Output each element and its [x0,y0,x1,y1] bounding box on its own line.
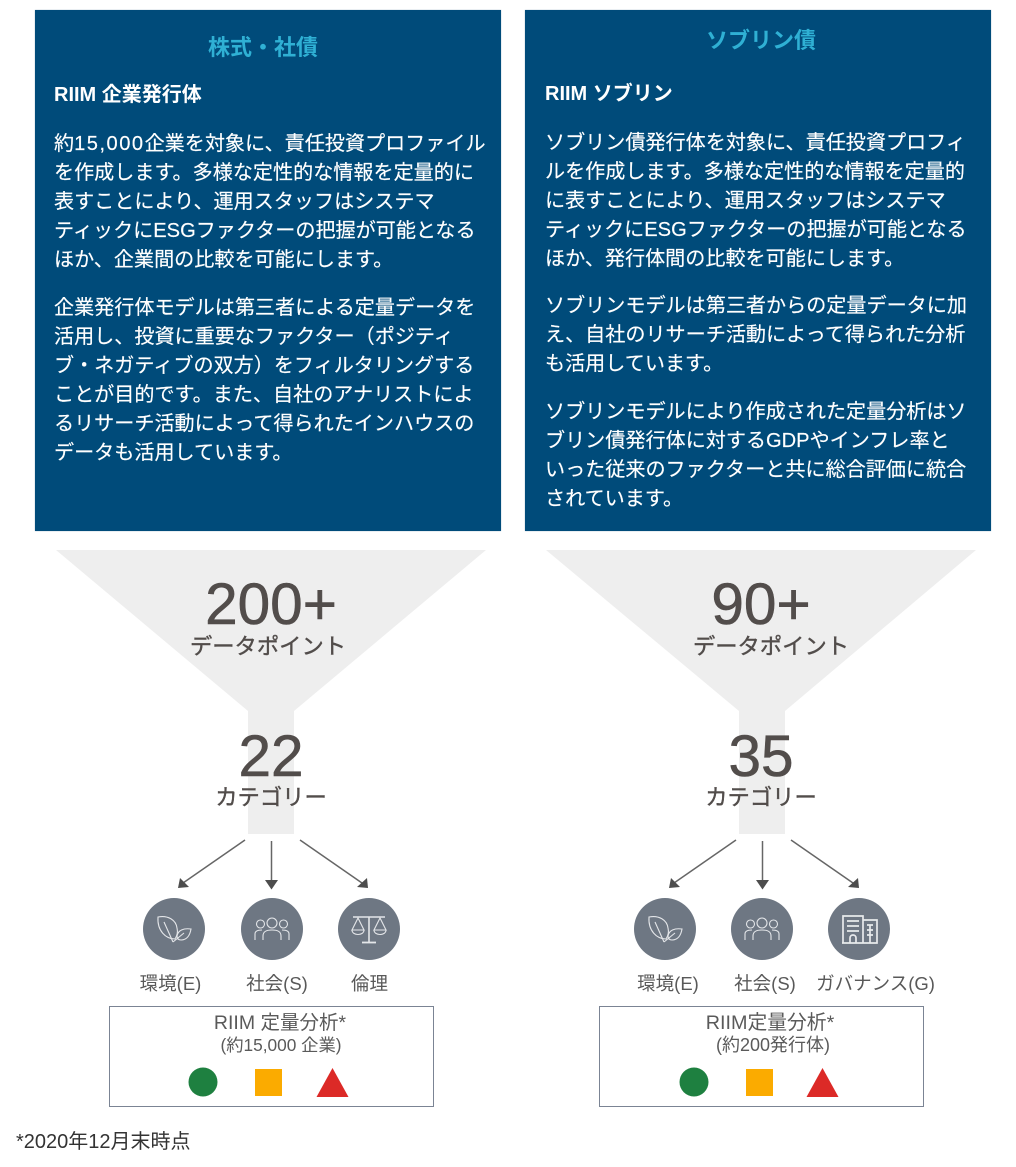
text block: sovereign paragraph 1 [545,132,967,270]
text block: sovereign paragraph 2: ソブリンモデルは第三者からの定量データに加 [545,295,967,317]
text block: sovereign paragraph 1: ソブリン債発行体を対象に、責任投資プロフィ [545,132,966,154]
text block: corporate paragraph 2: 企業発行体モデルは第三者による定量データを [54,296,475,318]
text block: corporate paragraph 2 [54,296,475,464]
text block: corporate paragraph 2: 活用し、投資に重要なファクター（ポジティ [54,326,454,348]
text block: sovereign paragraph 3: ブリン債発行体に対するGDPやインフレ率と [545,430,950,452]
subheading: RIIM corporate issuers: RIIM 企業発行体 [54,84,202,106]
text block: sovereign paragraph 1: ティックにESGファクターの把握が可能となる [545,219,967,241]
text block: corporate paragraph 1 [54,132,486,270]
box subtitle: (約15,000 企業) [220,1035,342,1055]
text block: sovereign paragraph 2 [545,294,967,375]
panel: equities and corporate bonds [35,10,501,531]
text block: sovereign paragraph 3: されています。 [545,488,683,510]
text block: corporate paragraph 2: ことが目的です。また、自社のアナリストによ [54,384,474,406]
rating shapes [188,1068,348,1097]
stat: 90+ data points: 90+ [711,572,811,637]
icon: scales (corporate) [338,898,400,960]
stat: 200+ data points [190,572,346,659]
stat: 200+ data points: 200+ [205,572,337,637]
icon: buildings (sovereign) [828,898,890,960]
arrows: sovereign [669,840,859,890]
text block: corporate paragraph 2: るリサーチ活動によって得られたインハウスの [54,412,474,434]
text block: sovereign paragraph 3 [545,400,967,510]
text block: sovereign paragraph 2: え、自社のリサーチ活動によって得られた分析 [545,324,965,346]
stat: 90+ data points: データポイント [693,634,849,659]
labels: corporate categories: 環境(E) [140,973,201,994]
labels: corporate categories: 社会(S) [246,973,308,994]
labels: sovereign categories: ガバナンス(G) [816,973,935,994]
text block: sovereign paragraph 1: ほか、発行体間の比較を可能にします。 [545,248,904,270]
stat: 90+ data points [693,572,849,659]
stat: 35 categories: カテゴリー [705,785,817,810]
panel heading: equities: 株式・社債 [208,35,318,60]
footnote: *2020年12月末時点 [16,1131,191,1153]
text block: corporate paragraph 1: ほか、企業間の比較を可能にします。 [54,248,393,270]
icon: leaf (sovereign) [634,898,696,960]
box title: RIIM定量分析* [706,1012,834,1034]
icon: people (sovereign) [731,898,793,960]
panel heading: sovereign bonds: ソブリン債 [706,28,816,52]
labels: corporate categories [140,973,388,994]
stat: 35 categories [705,724,817,810]
text block: corporate paragraph 1: 約15,000企業を対象に、責任投資プロファイル [54,133,486,155]
rating shapes [680,1068,838,1097]
box: corporate quantitative analysis [109,1006,434,1107]
text block: corporate paragraph 1: を作成します。多様な定性的な情報を定量的に [54,162,474,184]
box title: RIIM 定量分析* [214,1012,346,1034]
text block: sovereign paragraph 3: ソブリンモデルにより作成された定量分析はソ [545,401,967,423]
text block: sovereign paragraph 1: ルを作成します。多様な定性的な情報を定量的 [545,161,965,183]
labels: sovereign categories: 社会(S) [734,973,796,994]
text block: sovereign paragraph 2: も活用しています。 [545,353,723,375]
panel: sovereign bonds [525,10,991,531]
text block: corporate paragraph 2: ブ・ネガティブの双方）をフィルタリングする [54,354,474,376]
labels: sovereign categories [637,973,935,994]
box: sovereign quantitative analysis [599,1006,924,1107]
box subtitle: (約200発行体) [716,1035,830,1055]
subheading: RIIM sovereign: RIIM ソブリン [545,83,673,105]
stat: 22 categories: 22 [238,724,304,789]
text block: corporate paragraph 1: 表すことにより、運用スタッフはシステマ [54,191,435,213]
arrows: corporate [178,840,368,890]
text block: corporate paragraph 1: ティックにESGファクターの把握が可能となる [54,220,476,242]
icon: people (corporate) [241,898,303,960]
stat: 35 categories: 35 [728,724,794,789]
stat: 200+ data points: データポイント [190,634,346,659]
text block: sovereign paragraph 1: に表すことにより、運用スタッフはシステマ [545,190,946,212]
icon: leaf (corporate) [143,898,205,960]
stat: 22 categories [215,724,327,810]
text block: corporate paragraph 2: データも活用しています。 [54,442,293,464]
text block: sovereign paragraph 3: いった従来のファクターと共に総合評価に統合 [545,459,966,481]
stat: 22 categories: カテゴリー [215,785,327,810]
labels: corporate categories: 倫理 [351,973,388,994]
labels: sovereign categories: 環境(E) [637,973,699,994]
